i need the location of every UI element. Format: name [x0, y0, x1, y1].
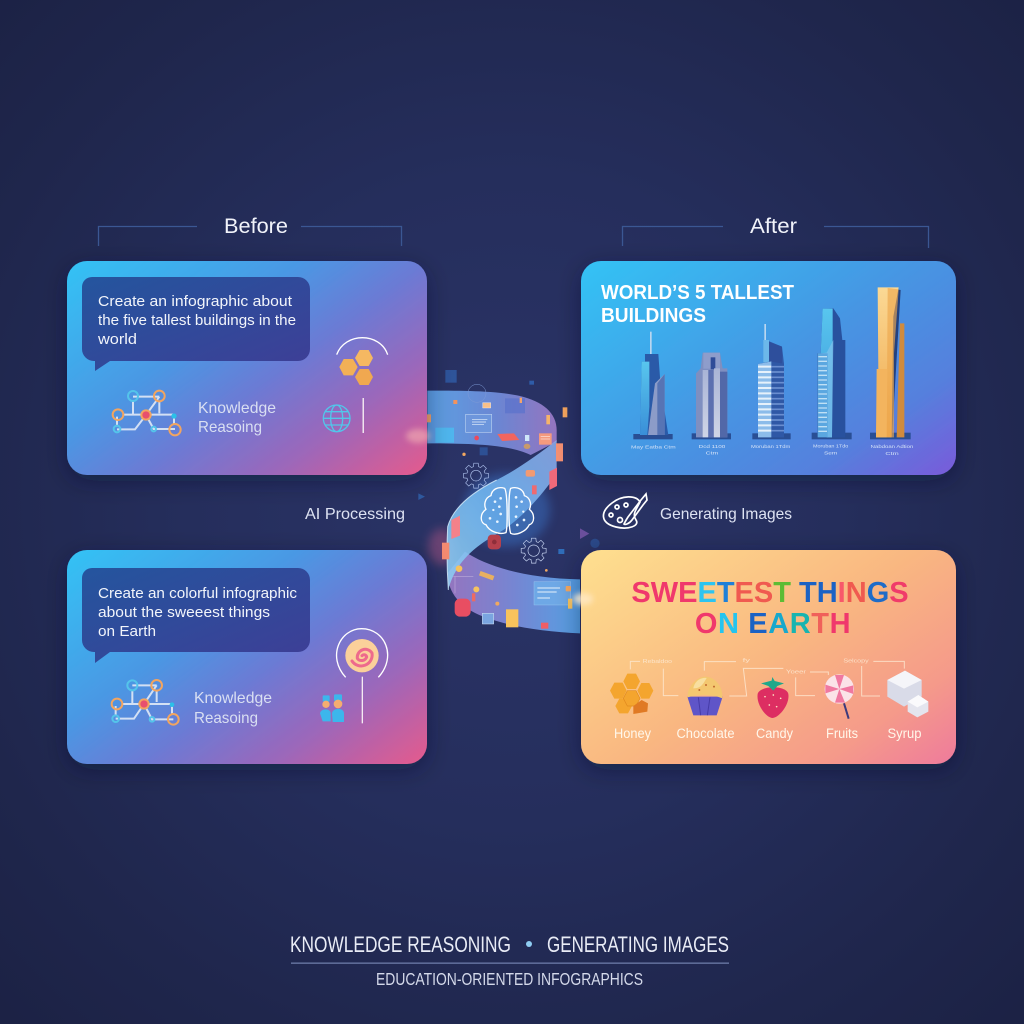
- building 1: [633, 332, 673, 439]
- building captions: Moruban 1Tdm: [751, 444, 790, 450]
- icon: honeycomb: [337, 338, 388, 385]
- panel: before, buildings prompt: [67, 261, 427, 475]
- building captions: Sem: [824, 451, 837, 457]
- faint connector labels: [643, 658, 869, 675]
- central ribbon: AI processing: [418, 370, 600, 633]
- icon: knowledge network: [113, 391, 181, 435]
- ribbon bottom band: [447, 552, 580, 633]
- title: WORLD’S 5 TALLEST: [601, 282, 794, 304]
- icon: honey: [610, 674, 653, 714]
- label: knowledge reasoning: [198, 400, 276, 436]
- prompt speech bubble: about the sweeest things: [98, 604, 270, 621]
- footer: [290, 932, 729, 989]
- ribbon floating chips: [418, 370, 600, 629]
- icon: gear left: [464, 463, 488, 488]
- labels: sweets: Syrup: [888, 726, 922, 741]
- building captions: May Eatba Ctm: [631, 444, 676, 450]
- glow: ribbon meets left card: [406, 429, 430, 443]
- ribbon glowing edge: [447, 480, 497, 590]
- heading: Before: Before: [224, 215, 288, 238]
- building 5: [870, 287, 911, 439]
- icon: lollipop: [337, 629, 388, 723]
- icon: artist palette: [603, 494, 647, 528]
- prompt speech bubble: on Earth: [98, 623, 156, 640]
- label: knowledge reasoning: Knowledge: [198, 400, 276, 417]
- connector lines: [630, 661, 904, 696]
- glow: ribbon meets right card: [573, 593, 593, 605]
- icon: pinwheel lollipop: [825, 674, 854, 719]
- panel: before, sweets prompt: [67, 550, 427, 764]
- title: sweetest things on earth: SWEETEST THINGS: [631, 577, 909, 609]
- prompt speech bubble: Create an colorful infographic: [98, 585, 297, 602]
- chart: five tallest buildings: [631, 287, 914, 457]
- faint connector labels: Rebaldoo: [643, 659, 672, 665]
- icon: strawberry: [757, 677, 788, 718]
- title: sweetest things on earth: ON EARTH: [695, 608, 851, 640]
- icon: sugar cubes: [887, 671, 928, 717]
- heading: Before: [98, 215, 402, 246]
- panel: after, sweetest things: [581, 550, 956, 764]
- icon: people: [320, 694, 344, 722]
- label: knowledge reasoning: Reasoing: [198, 419, 262, 436]
- icon: globe: [323, 405, 350, 432]
- icon: cupcake: [687, 677, 723, 715]
- building 4: [812, 308, 852, 439]
- card background: [67, 550, 427, 764]
- faint connector labels: Yoeer: [786, 669, 806, 675]
- building 3: [752, 324, 791, 439]
- building captions: [631, 444, 914, 457]
- footer: topics: GENERATING IMAGES: [547, 932, 729, 957]
- faint connector labels: fy: [743, 658, 750, 664]
- label: knowledge reasoning: Knowledge: [194, 690, 272, 707]
- heading: After: [622, 215, 928, 248]
- ribbon top band: [427, 391, 557, 455]
- title: [601, 282, 794, 327]
- labels: sweets: Chocolate: [676, 726, 734, 741]
- divider line: [362, 398, 364, 433]
- footer: subtitle: EDUCATION-ORIENTED INFOGRAPHICS: [376, 969, 643, 989]
- panel: after, tallest buildings: [581, 261, 956, 475]
- labels: sweets: Honey: [614, 726, 651, 741]
- card background: [581, 261, 956, 475]
- heading: After: After: [750, 215, 797, 238]
- footer: topics: [290, 932, 729, 957]
- faint connector labels: Selcopy: [843, 658, 869, 664]
- card background: [67, 261, 427, 475]
- building 2: [692, 353, 731, 439]
- labels: sweets: [614, 726, 922, 741]
- prompt speech bubble: world: [97, 331, 137, 348]
- building captions: Ctm: [885, 451, 899, 457]
- prompt speech bubble: the five tallest buildings in the: [98, 312, 296, 329]
- labels: sweets: Fruits: [826, 726, 858, 741]
- building captions: Nabdoan Adtion: [871, 444, 914, 450]
- ribbon middle band: [447, 440, 557, 590]
- icon: brain: [481, 488, 534, 534]
- card background: [581, 550, 956, 764]
- labels: sweets: Candy: [756, 726, 793, 741]
- prompt speech bubble: Create an infographic about: [98, 293, 293, 310]
- prompt speech bubble: [82, 277, 310, 371]
- icon: knowledge network: [112, 680, 179, 725]
- building captions: Dcd 1100: [699, 444, 726, 450]
- building captions: Ctm: [706, 451, 718, 457]
- label: knowledge reasoning: Reasoing: [194, 710, 258, 727]
- label: AI processing: AI Processing: [305, 506, 405, 523]
- icon: gear right: [521, 538, 546, 563]
- title: sweetest things on earth: [631, 577, 909, 640]
- title: BUILDINGS: [601, 305, 706, 327]
- footer: topics: KNOWLEDGE REASONING: [290, 932, 511, 957]
- building captions: Moruban 1Tdo: [813, 444, 849, 450]
- label: knowledge reasoning: [194, 690, 272, 727]
- prompt speech bubble: [82, 568, 310, 663]
- label: generating images: Generating Images: [660, 506, 792, 523]
